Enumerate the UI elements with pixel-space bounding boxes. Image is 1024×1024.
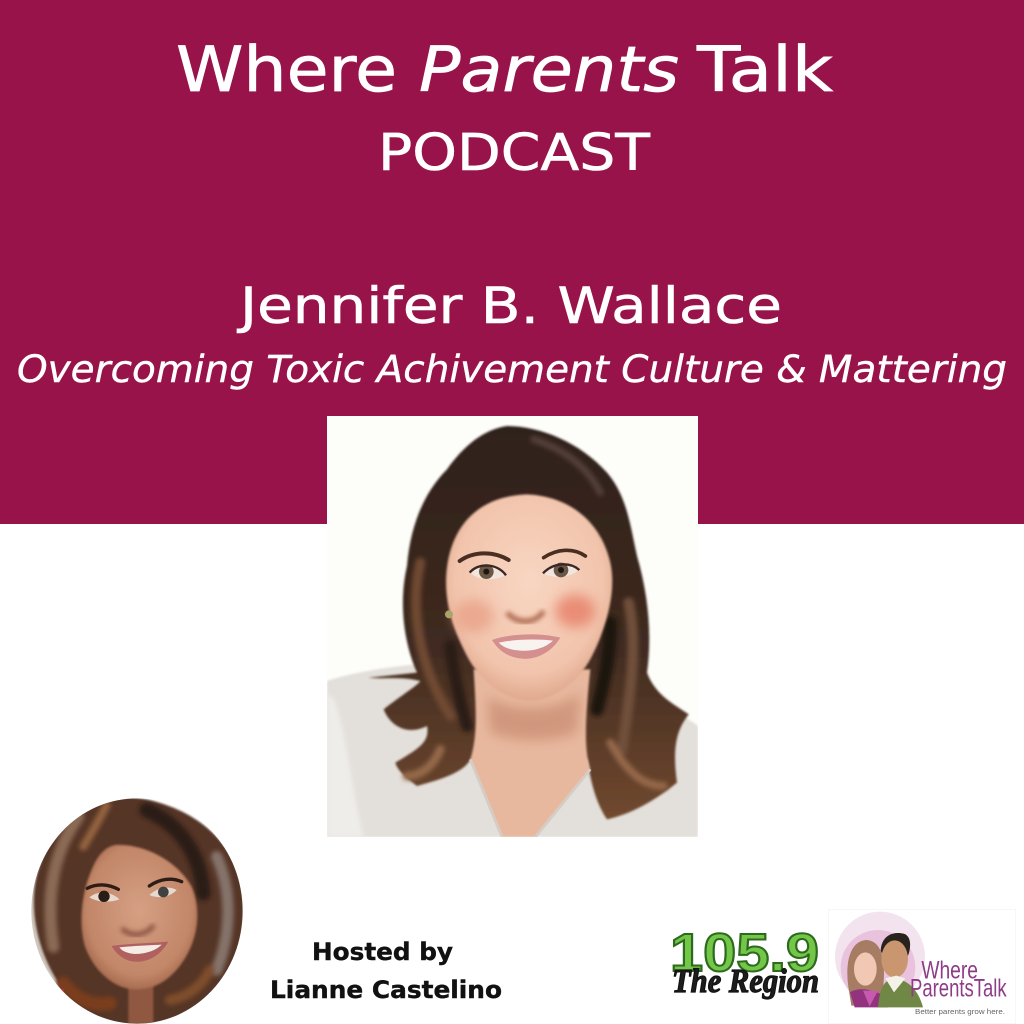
mouth [492,634,560,659]
hair highlights [407,439,664,786]
logo wordmark [910,956,1007,1003]
man [878,933,923,1007]
hosted by credit: Lianne Castelino [270,976,502,1004]
cheeks [454,599,494,633]
brows [460,550,585,561]
guest name: Jennifer B. Wallace [237,277,782,335]
episode title: Overcoming Toxic Achivement Culture & Mattering [17,348,1007,391]
eyes [470,563,579,579]
neck shadow [487,693,580,740]
hosted by credit [270,938,502,1004]
logo wordmark: Where [921,956,978,984]
face [446,494,612,701]
eyes [89,887,177,902]
brows [87,879,182,889]
logo: 105.9 The Region: 105.9 [670,923,819,983]
earring [445,610,453,618]
hosted by credit: Hosted by [312,938,453,966]
neck [128,983,153,1024]
subtitle: podcast: PODCAST [378,124,651,183]
hair [369,426,689,819]
host portrait [31,798,243,1024]
hair [34,796,244,1024]
backdrop [31,827,66,995]
logo circles [835,912,925,1002]
title: Where Parents Talk: Talk [696,33,833,106]
nose [507,611,544,621]
guest portrait [327,416,698,837]
neck and chest [470,669,590,837]
neckline [470,759,590,837]
title: Where Parents Talk: Parents [419,33,679,106]
title: Where Parents Talk [176,33,833,106]
nose [122,925,154,934]
header band [0,0,1024,524]
sweater [327,664,698,837]
logo: 105.9 The Region: The Region [672,963,819,1000]
mouth [112,942,168,962]
hair highlights [50,805,228,1004]
logo tagline: Better parents grow here. [915,1007,1005,1016]
woman [847,940,893,1007]
face [81,845,197,989]
logo: Where Parents Talk [828,909,1016,1024]
red top [61,988,64,992]
title: Where Parents Talk: Where [176,33,397,106]
